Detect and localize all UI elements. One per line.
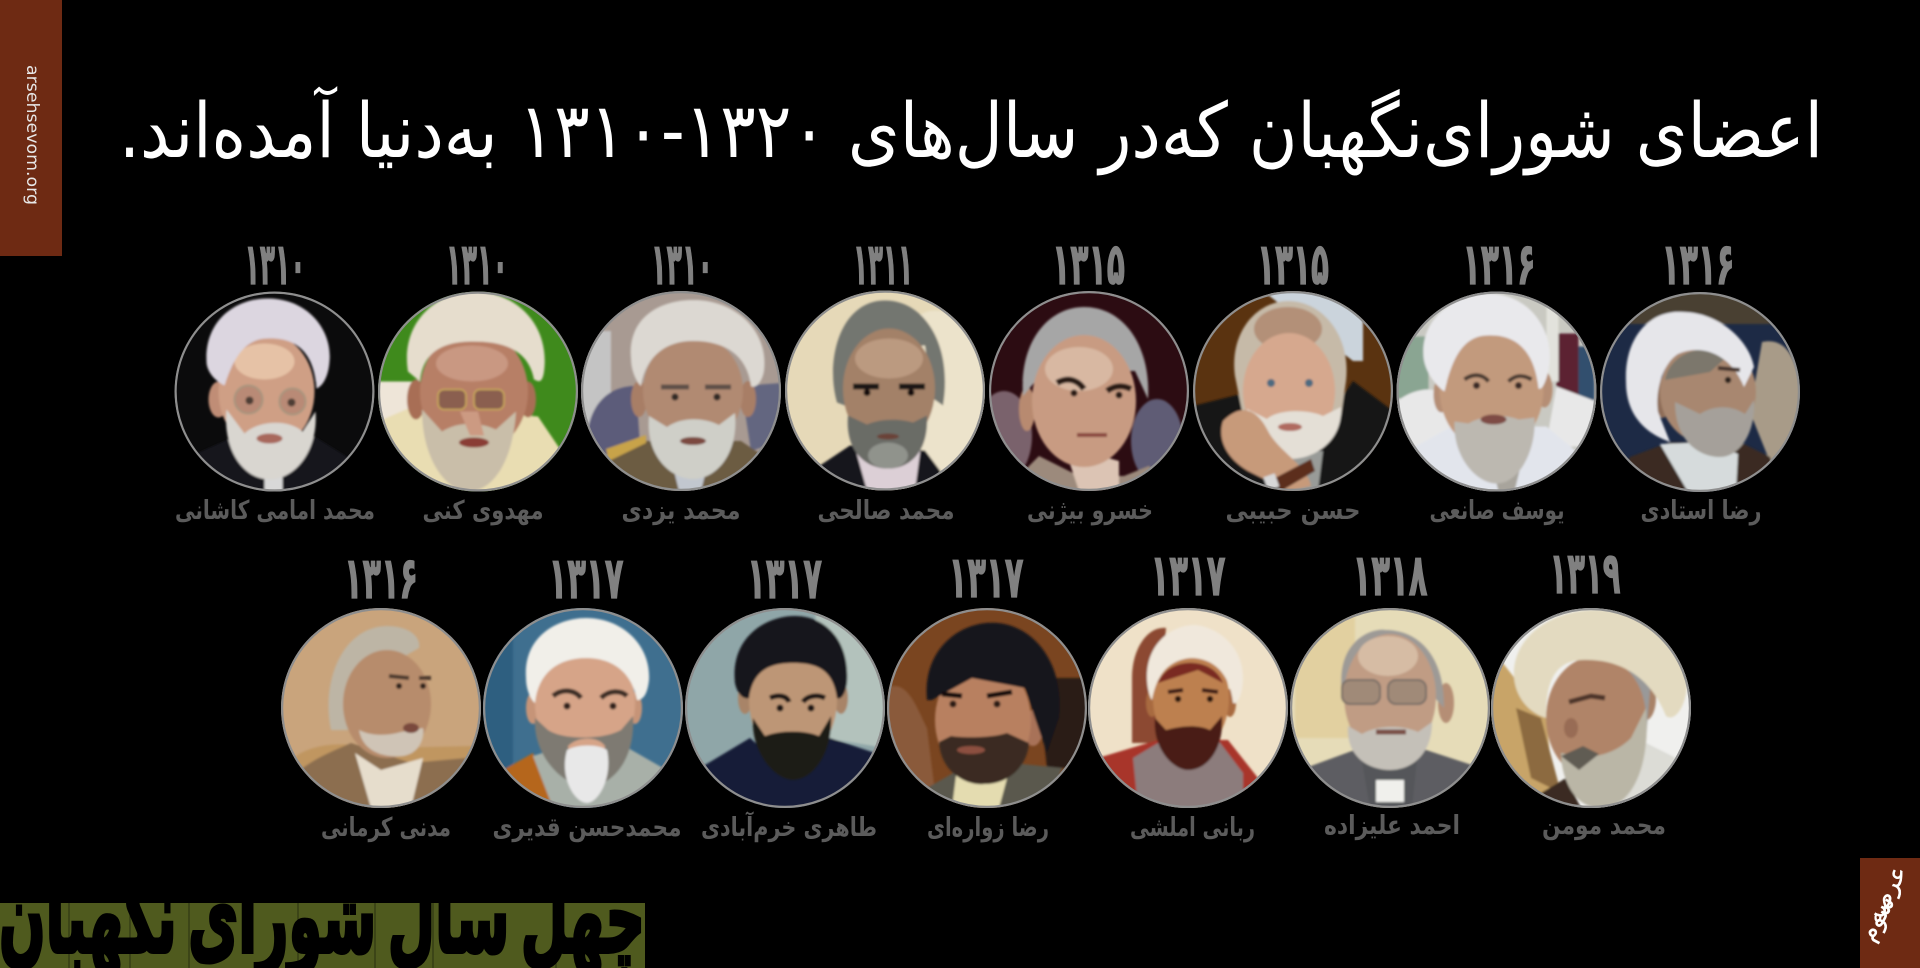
- name: حسن حبیبی: [1226, 496, 1360, 526]
- name: مدنی کرمانی: [321, 813, 451, 843]
- portrait: [581, 291, 781, 491]
- member: مهدوی کنی: ۱۳۱۰: [446, 230, 508, 298]
- logo: bottom right: [1853, 858, 1920, 968]
- logo: bottom right: عرصه: [1859, 861, 1913, 928]
- member: احمد علیزاده: [1290, 541, 1490, 841]
- name: احمد علیزاده: [1324, 811, 1460, 841]
- banner: چهل سال شورای نگهبان: [0, 859, 645, 968]
- year: ۱۳۱۸: [1352, 541, 1428, 609]
- side tab: website: arsehsevom.org: [22, 65, 42, 205]
- name: یوسف صانعی: [1430, 496, 1564, 526]
- member: محمد امامی کاشانی: [174, 230, 375, 526]
- portrait: [1290, 608, 1490, 808]
- year: ۱۳۱۷: [548, 544, 624, 612]
- side tab: website: [0, 0, 62, 256]
- member: ربانی املشی: [1088, 541, 1288, 843]
- member: مدنی کرمانی: [281, 544, 481, 843]
- name: طاهری خرم‌آبادی: [701, 811, 877, 843]
- portrait: [1193, 291, 1393, 491]
- portrait: [281, 608, 481, 808]
- member: محمدحسن قدیری: [483, 544, 683, 843]
- member: محمد مومن: [1491, 539, 1691, 841]
- portrait: [685, 608, 885, 808]
- portrait: [1491, 608, 1691, 808]
- portrait: [887, 608, 1087, 808]
- year: ۱۳۱۶: [1462, 230, 1536, 298]
- portrait: [785, 290, 985, 490]
- member: مهدوی کنی: [378, 230, 578, 526]
- member: رضا زواره‌ای: [887, 543, 1087, 843]
- name: مهدوی کنی: [422, 496, 544, 526]
- name: رضا استادی: [1640, 496, 1762, 526]
- member: رضا استادی: [1600, 230, 1800, 526]
- name: محمد امامی کاشانی: [175, 496, 375, 526]
- year: ۱۳۱۵: [1257, 230, 1329, 298]
- member: محمد یزدی: [581, 230, 781, 526]
- year: ۱۳۱۶: [344, 544, 418, 612]
- year: ۱۳۱۶: [1662, 230, 1734, 298]
- portrait: [483, 608, 683, 808]
- year: ۱۳۱۷: [747, 544, 822, 612]
- member: محمد صالحی: ۱۳۱۱: [853, 230, 913, 298]
- member: یوسف صانعی: [1396, 230, 1596, 526]
- name: رضا زواره‌ای: [927, 813, 1049, 843]
- logo: bottom right: سوم: [1853, 891, 1900, 946]
- portrait: [1396, 292, 1596, 492]
- name: ربانی املشی: [1130, 813, 1255, 843]
- name: محمد یزدی: [622, 496, 740, 526]
- name: محمد صالحی: [818, 496, 954, 526]
- year: ۱۳۱۷: [1150, 541, 1226, 609]
- member: طاهری خرم‌آبادی: [685, 544, 885, 843]
- member: حسن حبیبی: [1193, 230, 1393, 526]
- name: خسرو بیژنی: [1027, 496, 1153, 526]
- year: ۱۳۱۵: [1052, 230, 1125, 298]
- member: خسرو بیژنی: [989, 246, 1189, 526]
- portrait: [1088, 608, 1288, 808]
- year: ۱۳۱۷: [948, 543, 1024, 611]
- title: اعضای شورای‌نگهبان که‌در سال‌های ۱۳۲۰-۱۳۱۰ به‌دنیا آمده‌اند.: [119, 86, 1823, 176]
- member: محمد امامی کاشانی: ۱۳۱۰: [244, 230, 306, 298]
- year: ۱۳۱۹: [1550, 539, 1620, 607]
- member: محمد یزدی: ۱۳۱۰: [651, 230, 713, 298]
- member: محمد صالحی: [785, 230, 985, 526]
- portrait: [378, 292, 578, 492]
- portrait: [174, 292, 374, 496]
- portrait: [976, 291, 1189, 491]
- name: محمدحسن قدیری: [492, 813, 682, 843]
- name: محمد مومن: [1542, 811, 1666, 841]
- portrait: [1600, 292, 1800, 492]
